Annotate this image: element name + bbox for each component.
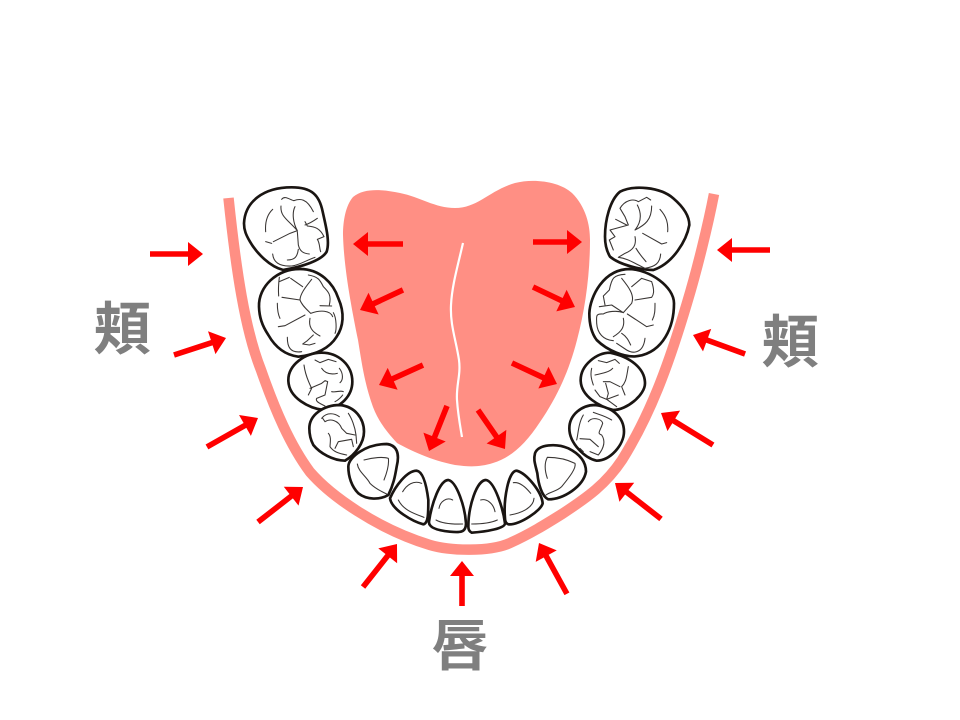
arrow: outer left 4 xyxy=(251,478,310,531)
tooth: right molar 1 xyxy=(605,188,689,270)
arrow: outer left 2 xyxy=(170,327,230,366)
arrow: tongue bottom right xyxy=(468,403,515,456)
tongue centre line xyxy=(451,243,463,437)
tooth: right central incisor xyxy=(468,480,505,533)
arrow: tongue left 3 xyxy=(374,354,428,396)
tooth: left molar 2 xyxy=(259,269,343,357)
tooth: right premolar 2 xyxy=(569,405,624,461)
label: left cheek: 頬 xyxy=(94,298,150,362)
tooth: right molar 2 xyxy=(589,269,674,356)
lip and cheek band xyxy=(228,194,714,550)
tooth: right premolar 1 xyxy=(581,353,645,410)
arrow: outer left 5 xyxy=(354,537,406,594)
arrow: tongue bottom left xyxy=(418,402,458,455)
tooth: left lateral incisor xyxy=(390,471,428,524)
arrow: outer left 3 xyxy=(201,408,264,457)
arrow: tongue left 1 xyxy=(353,232,403,256)
tooth: right lateral incisor xyxy=(505,471,543,524)
tooth: left premolar 2 xyxy=(309,405,364,461)
arrow: outer right 4 xyxy=(608,474,668,528)
arrow: tongue right 2 xyxy=(528,276,580,318)
tooth: right canine xyxy=(534,445,586,499)
tongue xyxy=(343,181,590,466)
arrow: outer right 2 xyxy=(689,324,749,365)
arrow: outer left 1 xyxy=(150,242,203,266)
arrow: tongue left 2 xyxy=(355,279,408,321)
arrow: tongue right 1 xyxy=(533,230,582,254)
tooth: left canine xyxy=(348,444,398,499)
tooth: left molar 1 xyxy=(244,187,328,270)
arrow: outer right 5 xyxy=(528,537,577,600)
arrow: outer right 3 xyxy=(655,403,719,455)
label: right cheek: 頬 xyxy=(762,311,818,375)
arrow: tongue right 3 xyxy=(507,352,562,395)
tooth: left premolar 1 xyxy=(288,353,352,410)
label: lip: 唇 xyxy=(432,614,488,678)
arrow: outer bottom xyxy=(450,561,474,606)
arrow: outer right 1 xyxy=(717,238,770,262)
tooth: left central incisor xyxy=(429,480,466,532)
